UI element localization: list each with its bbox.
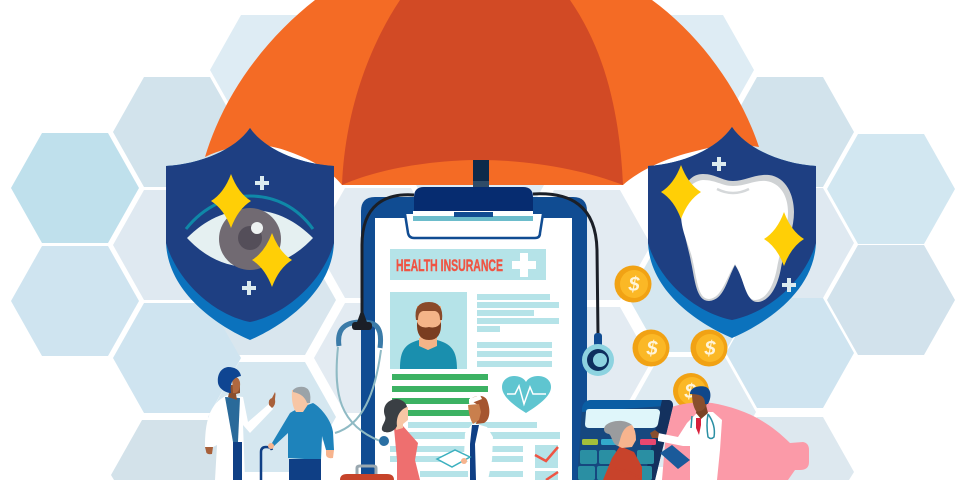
- suitcase: [340, 466, 394, 480]
- coin 2: $: [645, 338, 658, 360]
- right shield with tooth: [648, 127, 816, 338]
- calculator: [577, 400, 673, 480]
- piggy bank: [662, 402, 809, 480]
- green bars: [392, 374, 488, 416]
- person: woman in pink dress: [382, 399, 420, 480]
- clipboard: [361, 187, 587, 480]
- banner: health insurance: HEALTH INSURANCE: [396, 256, 503, 275]
- coin 1: [614, 266, 652, 302]
- coin 4: $: [683, 381, 696, 403]
- icon: plus top: [712, 157, 726, 171]
- paper: [375, 218, 572, 480]
- text lines lower: [390, 422, 560, 477]
- doctor's stethoscope: [691, 414, 714, 438]
- icon: sparkle left: [661, 165, 701, 219]
- person: right doctor with clipboard: [650, 386, 722, 480]
- icon: sparkle right: [764, 212, 804, 266]
- icon: plus bottom: [782, 278, 796, 292]
- checkboxes: [535, 445, 558, 480]
- doctor's clipboard: [660, 445, 690, 469]
- coin 3: [690, 330, 728, 366]
- person: elderly woman: [603, 421, 642, 480]
- coin 3: $: [703, 338, 716, 360]
- coin 4: [673, 373, 709, 409]
- person: nurse with clipboard: [437, 395, 493, 480]
- coins: [614, 266, 728, 409]
- icon: sparkle lower: [252, 233, 292, 287]
- stethoscope: [335, 194, 614, 446]
- icon: plus upper: [255, 176, 269, 190]
- umbrella: [205, 0, 759, 187]
- coin 1: $: [627, 274, 640, 296]
- icon: eye: [186, 196, 313, 270]
- left shield with eye: [166, 128, 334, 340]
- icon: sparkle upper: [211, 174, 251, 228]
- text lines beside photo: [477, 294, 559, 367]
- icon: heart with pulse: [502, 376, 551, 413]
- person: left doctor: [205, 367, 276, 480]
- patient photo: [390, 292, 467, 369]
- banner: health insurance: [390, 249, 546, 280]
- icon: plus lower: [242, 281, 256, 295]
- calculator buttons: [578, 439, 656, 480]
- clip: [405, 187, 543, 238]
- icon: tooth: [681, 174, 794, 302]
- person: elderly man with cane: [261, 387, 334, 480]
- coin 2: [632, 330, 670, 366]
